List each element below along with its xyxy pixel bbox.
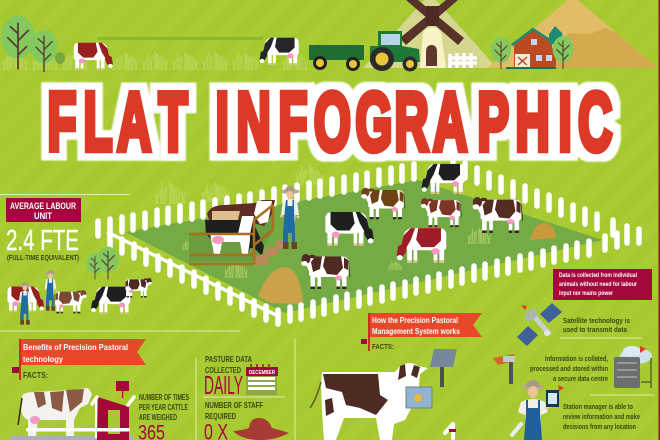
manager text: Station manager is able to [563, 404, 633, 411]
title [48, 76, 612, 168]
panel: benefits [10, 339, 289, 440]
weigh crate [26, 381, 134, 440]
benefits ribbon [19, 339, 146, 380]
pen steps [256, 240, 288, 265]
haystack small [530, 223, 556, 240]
labour badge: AVERAGE LABOUR [10, 201, 76, 211]
manager text: review information and make [563, 414, 640, 421]
data callout: animals without need for labour [559, 281, 637, 288]
data callout [553, 269, 652, 300]
satellite text: Satellite technology is [563, 318, 630, 325]
front fence left [107, 232, 278, 320]
right edge line [658, 0, 660, 440]
front fence right [278, 226, 639, 324]
windmill [400, 0, 464, 68]
barn [506, 26, 563, 69]
pasture stat: COLLECTED [205, 365, 241, 375]
bottom tools [445, 424, 521, 438]
white fence at windmill [449, 53, 477, 68]
weigh scale platform [10, 436, 133, 440]
tablet [406, 387, 432, 408]
farmer in field [280, 186, 300, 249]
facts label: FACTS: [23, 371, 48, 380]
data callout: input nor mains power [559, 290, 613, 297]
title outline: FLAT INFOGRAPHIC [48, 76, 612, 168]
panel: how the system works [310, 303, 652, 440]
sand hills [487, 0, 658, 68]
green field [125, 180, 603, 313]
server and cloud [614, 346, 652, 388]
grass tufts behind fence [156, 164, 323, 204]
small trees [86, 246, 118, 280]
pasture stat: DAILY [204, 370, 243, 400]
staff stat: NUMBER OF STAFF [205, 400, 263, 410]
weighed stat: PER YEAR CATTLE [139, 403, 188, 412]
labour note: (FULL-TIME EQUIVALENT) [7, 255, 79, 262]
weighed stat: ARE WEIGHED [139, 413, 177, 422]
black and white cow in pen [205, 216, 264, 256]
weighed stat [138, 393, 189, 440]
weighed stat: NUMBER OF TIMES [139, 393, 189, 402]
satellite [517, 303, 562, 346]
tractor [370, 31, 420, 72]
distant hedge line [97, 37, 263, 40]
panel: average labour [0, 194, 152, 325]
camera [493, 354, 515, 384]
system ribbon [368, 313, 482, 351]
data centre text: processed and stored within [530, 366, 608, 373]
large cow [310, 363, 428, 440]
benefits ribbon: technology [23, 354, 63, 364]
barn trees [491, 36, 573, 69]
pale hill behind windmill [363, 0, 497, 68]
solar panel [430, 349, 457, 387]
calendar icon [246, 364, 278, 395]
station manager [518, 380, 564, 440]
left trees [1, 16, 65, 72]
staff stat [204, 400, 263, 440]
dividers [0, 331, 655, 440]
black cow [260, 38, 299, 65]
system ribbon: Management System works [372, 327, 460, 336]
hat icon [233, 418, 289, 440]
system ribbon: How the Precision Pastoral [372, 316, 458, 325]
data callout: Data is collected from individual [559, 272, 637, 279]
facts label [361, 339, 394, 351]
brown cow in pen [207, 200, 275, 226]
grass tufts in field [183, 227, 490, 278]
pasture stat: PASTURE DATA [205, 354, 252, 364]
title text: FLAT INFOGRAPHIC [48, 76, 612, 168]
facts label: FACTS: [372, 344, 394, 351]
satellite text [563, 318, 630, 334]
benefits ribbon: Benefits of Precision Pastoral [23, 342, 128, 352]
field cows [301, 164, 523, 289]
satellite text: used to transmit data [563, 327, 627, 334]
pen with cows [189, 200, 288, 265]
back fence right [453, 162, 613, 235]
ground grass [3, 51, 308, 70]
labour value: 2.4 FTE [6, 225, 79, 257]
haystack large [258, 267, 303, 304]
top farm scene [1, 0, 658, 72]
pen rails [189, 205, 273, 264]
data centre text: a secure data centre [553, 376, 608, 383]
calendar icon: DECEMBER [249, 370, 275, 376]
red cow [74, 43, 113, 70]
trailer [309, 45, 364, 71]
labour badge: UNIT [34, 211, 52, 221]
manager text [563, 404, 640, 431]
data centre text [530, 356, 608, 383]
manager text: decisions from any location [563, 424, 636, 431]
data centre text: Information is collated, [545, 356, 608, 363]
labour badge [6, 198, 81, 222]
weighed cow [18, 388, 92, 436]
facts label [12, 367, 48, 380]
pasture stat [204, 354, 252, 400]
pasture scene [98, 162, 639, 324]
back fence left [98, 164, 414, 236]
staff stat: REQUIRED [205, 411, 236, 421]
cattle and workers [8, 270, 152, 325]
